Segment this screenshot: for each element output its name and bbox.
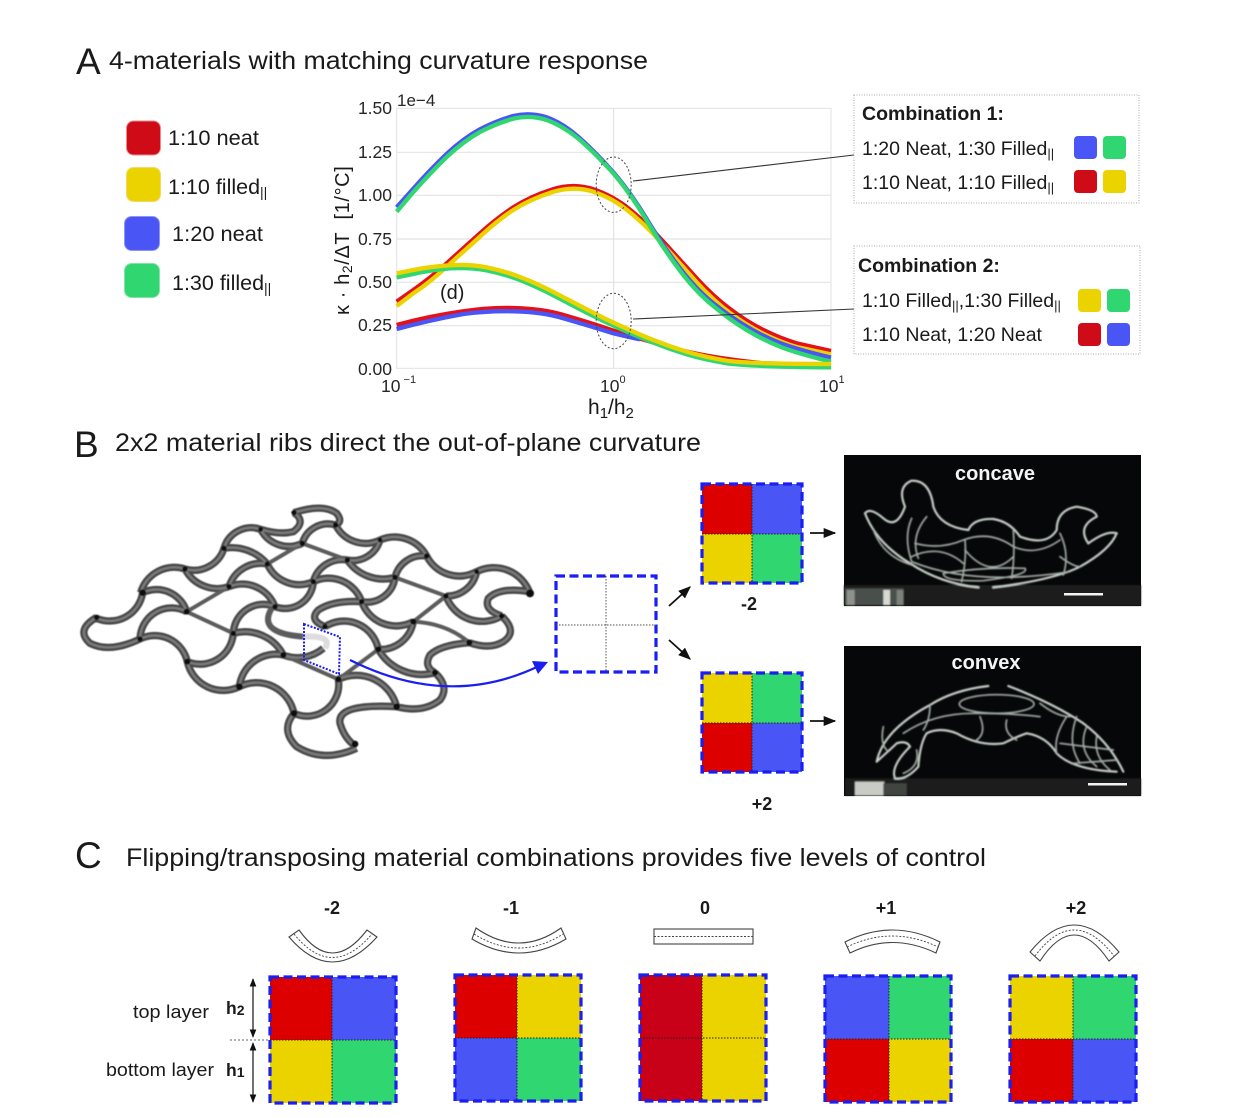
arrow: square to convex photo [810,720,835,722]
x axis title: 1 [600,405,608,422]
y axis tick labels: 0.50 [358,272,392,292]
panel: combination 2: || [952,298,959,313]
empty rib cross-section [556,576,656,672]
legend item: 1:20 neat: 1:20 neat [172,222,263,246]
plot grid and curves [397,108,831,368]
dashed selection on lattice [304,624,340,674]
panel: combination 2: 1:10 Filled [862,290,952,312]
x axis tick labels: 10 [819,376,838,396]
x axis title: h [588,396,600,419]
legend item: 1:10 neat: 1:10 neat [168,126,259,150]
legend item: 1:10 filled: || [260,184,267,200]
panel: combination 1 [854,95,1139,203]
callout ellipse: combination 2 [596,293,631,349]
heading: panel C [75,835,986,876]
y axis title: 2 [339,265,355,273]
layer labels [106,998,245,1080]
legend item: 1:10 filled: 1:10 filled [168,175,260,199]
y axis tick labels [358,98,392,379]
panel: combination 2: Combination 2: [858,255,1000,277]
heading: panel A: 4-materials with matching curvature response [109,47,648,75]
label: -2: -2 [741,594,757,614]
level +2 [1010,898,1136,1102]
square -2 [270,977,396,1103]
rib icon: +1 [845,930,940,953]
level +2: +2 [1066,898,1086,918]
layer labels: h [226,998,237,1018]
level +1 [825,898,951,1102]
x axis tick labels [381,374,845,396]
y axis tick labels: 1.50 [358,98,392,118]
panel: combination 1: 1:20 Neat, 1:30 Filled [862,138,1047,160]
legend item: 1:30 filled: || [264,280,271,296]
level -2 [270,898,396,1103]
square +1 [825,976,951,1102]
layer labels: top layer [133,1001,209,1022]
x axis title: /h [608,396,626,419]
x axis tick labels: 1 [838,374,845,386]
annotation (d): (d) [440,282,464,304]
level +1: +1 [876,898,896,918]
level -2: -2 [324,898,340,918]
y axis title: κ · h [332,273,354,315]
y axis title: /ΔT [1/°C] [332,166,354,265]
heading: panel B [74,424,701,465]
square -1 [455,975,581,1101]
heading: panel A [76,41,648,82]
y axis tick labels: 0.25 [358,315,392,335]
scale bar [1064,593,1103,596]
heading: panel B: 2x2 material ribs direct the out-of-plane curvature [115,429,701,457]
arrow: selection to detail square [350,660,548,686]
layer labels: 1 [237,1064,245,1080]
lattice mesh illustration [84,508,534,755]
panel: combination 2: 1:10 Neat, 1:20 Neat [862,324,1043,346]
rib icon: -2 [289,930,377,962]
legend item: 1:30 filled: 1:30 filled [172,271,264,295]
material square: +2 [702,673,802,772]
layer labels: h [226,1060,237,1080]
level 0 [640,898,766,1101]
panel: combination 1: || [1047,146,1054,161]
x axis title: 2 [626,405,634,422]
arrow: to convex [669,640,690,659]
legend item: 1:10 neat [126,121,259,155]
heading: panel A: A [76,41,101,82]
photo: concave [844,455,1141,606]
dimension arrows [230,979,270,1102]
rib icon: 0 [654,929,753,944]
x axis tick labels: 10 [600,376,619,396]
heading: panel C: Flipping/transposing material combinations provides five levels of control [126,844,986,872]
arrow: to concave [669,587,690,606]
legend item: 1:30 filled [124,264,271,298]
level -1 [455,898,581,1101]
y axis tick labels: 0.75 [358,229,392,249]
legend: materials [124,121,271,298]
square +2 [1010,976,1136,1102]
x axis tick labels: 10 [381,376,400,396]
rib icon: -1 [472,928,566,953]
panel: combination 1: Combination 1: [862,103,1004,125]
y axis tick labels: 0.00 [358,359,392,379]
material square: -2 [702,484,802,583]
panel: combination 1: || [1047,180,1054,195]
y axis tick labels: 1.25 [358,142,392,162]
leader line: combination 1 [633,155,854,181]
scale bar [1088,783,1127,786]
panel: combination 1: 1:10 Neat, 1:10 Filled [862,172,1047,194]
legend item: 1:10 filled [126,168,267,202]
layer labels: 2 [237,1002,245,1018]
arrow: square to concave photo [810,532,835,534]
heading: panel B: B [74,424,99,465]
x axis tick labels: −1 [400,374,416,386]
panel: combination 2: ,1:30 Filled [959,290,1054,312]
rib icon: +2 [1030,925,1119,961]
level -1: -1 [503,898,519,918]
chart: curvature response [332,91,854,422]
x axis tick labels: 0 [619,374,626,386]
panel: combination 2 [854,246,1140,354]
layer labels: bottom layer [106,1059,214,1080]
photo: convex [844,646,1141,796]
level 0: 0 [700,898,710,918]
y axis tick labels: 1.00 [358,185,392,205]
legend item: 1:20 neat [124,216,263,250]
photo label: concave: concave [955,463,1035,485]
exponent label: 1e−4 [397,91,435,110]
square 0 [640,975,766,1101]
heading: panel C: C [75,835,102,876]
leader line: combination 2 [633,309,854,319]
label: +2: +2 [752,794,772,814]
panel: combination 2: || [1054,298,1061,313]
photo label: convex: convex [952,652,1020,674]
callout ellipse: combination 1 [596,157,631,212]
